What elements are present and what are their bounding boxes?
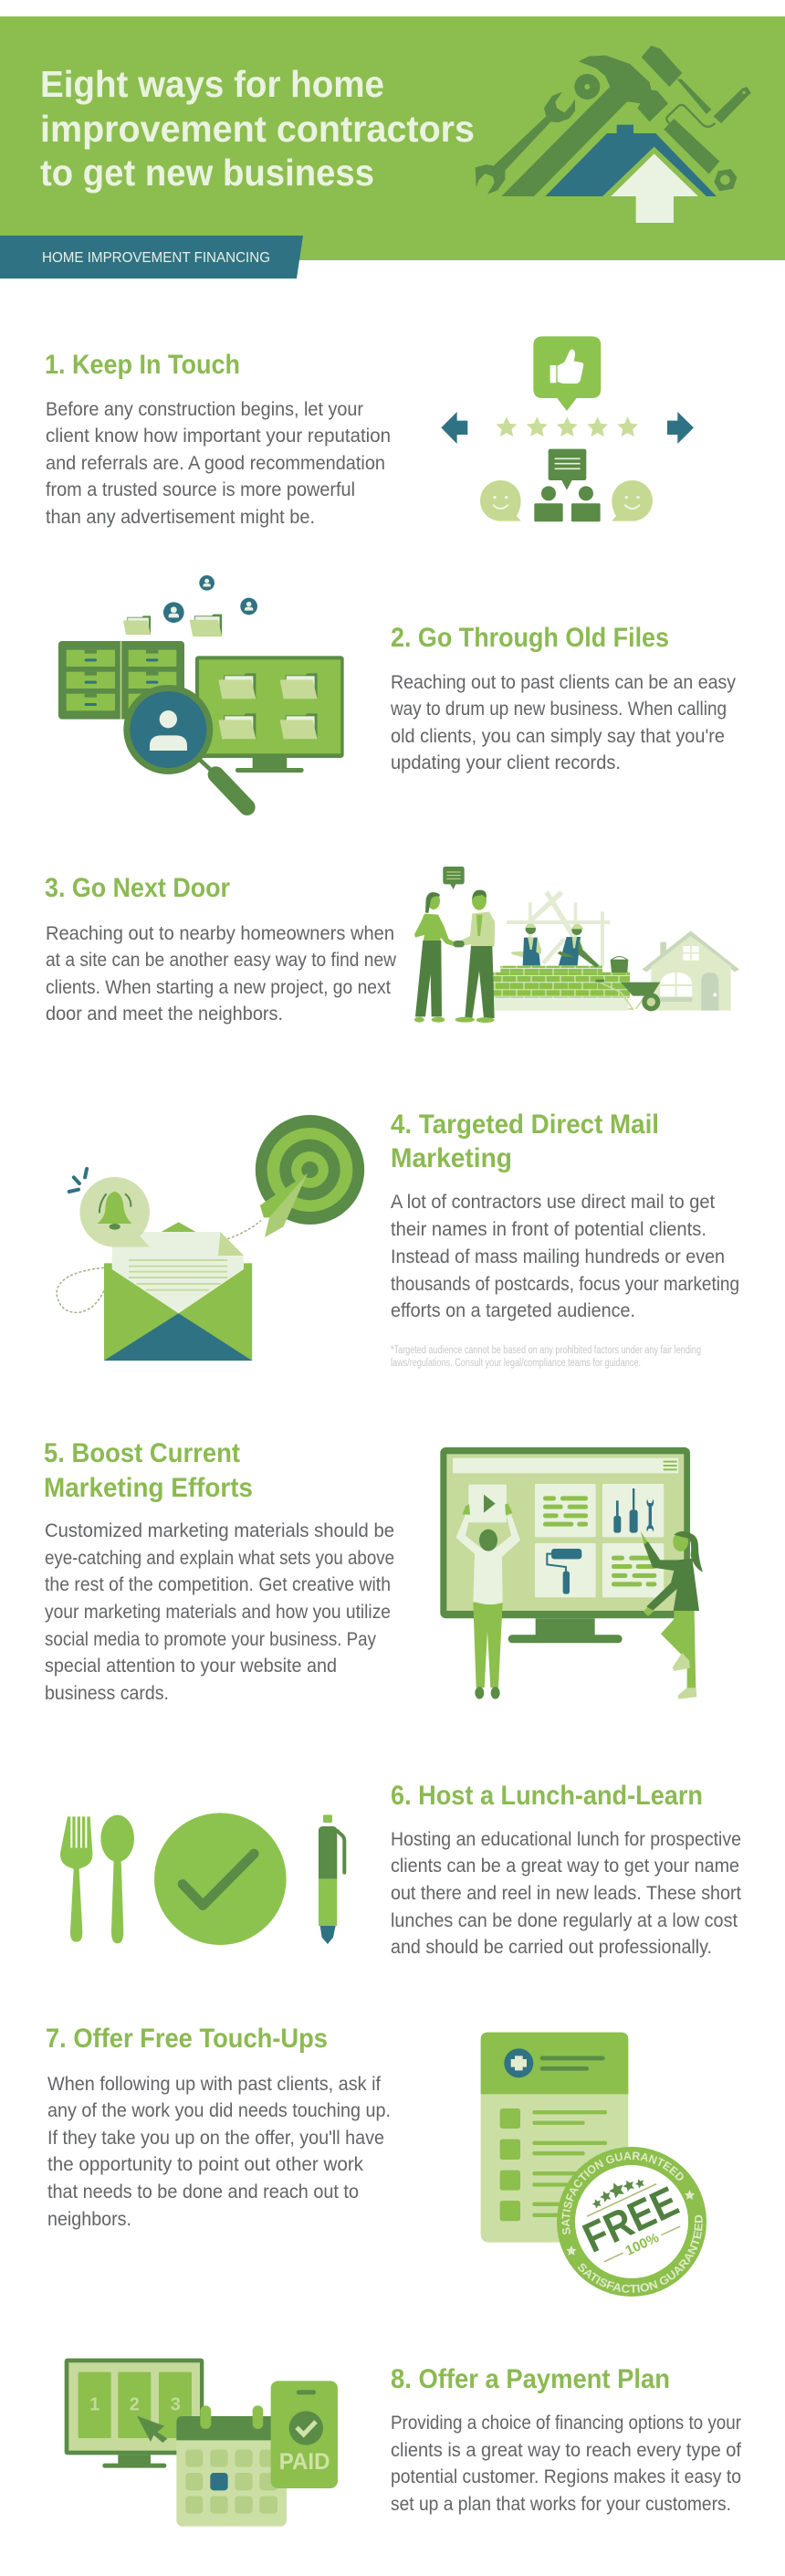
section 8 text: clients is a great way to reach every type of bbox=[391, 2440, 741, 2461]
section 1 text: than any advertisement might be. bbox=[46, 507, 315, 528]
title bbox=[40, 63, 475, 194]
section 4 heading bbox=[391, 1109, 659, 1173]
icon: reviews and referrals bbox=[441, 336, 694, 521]
section 4 text: A lot of contractors use direct mail to get bbox=[391, 1192, 715, 1213]
header banner bbox=[0, 16, 785, 260]
footnote: *Targeted audience cannot be based on any prohibited factors under any fair lending bbox=[391, 1345, 701, 1356]
footnote bbox=[391, 1345, 701, 1369]
section 3 heading: 3. Go Next Door bbox=[45, 873, 230, 903]
section 6 heading: 6. Host a Lunch-and-Learn bbox=[391, 1781, 703, 1811]
section 8 text bbox=[391, 2413, 741, 2515]
section 4 text: Instead of mass mailing hundreds or even bbox=[391, 1246, 725, 1267]
footnote: laws/regulations. Consult your legal/compliance teams for guidance. bbox=[391, 1358, 641, 1369]
section 5 heading bbox=[44, 1438, 253, 1503]
section 7 text: When following up with past clients, ask if bbox=[47, 2074, 381, 2095]
section 5 text: Customized marketing materials should be bbox=[45, 1520, 394, 1541]
section 5 text: the rest of the competition. Get creative with bbox=[45, 1574, 391, 1595]
section 2 text: Reaching out to past clients can be an easy bbox=[391, 672, 736, 693]
section 1 text: Before any construction begins, let your bbox=[46, 399, 363, 420]
section 8 text: set up a plan that works for your customers. bbox=[391, 2494, 731, 2515]
section 1 text: from a trusted source is more powerful bbox=[46, 479, 355, 500]
icon: house and tools bbox=[476, 46, 751, 223]
section 6 text: Hosting an educational lunch for prospective bbox=[391, 1829, 741, 1850]
icon: payment plan: 1 bbox=[89, 2394, 99, 2414]
section 5 text: business cards. bbox=[45, 1683, 169, 1704]
section 7 heading: 7. Offer Free Touch-Ups bbox=[46, 2024, 328, 2054]
section 4 text: thousands of postcards, focus your marketing bbox=[391, 1274, 739, 1295]
section 4 text: their names in front of potential clients. bbox=[391, 1219, 706, 1240]
section 3 text: at a site can be another easy way to find new bbox=[46, 950, 397, 971]
section 8 text: Providing a choice of financing options to your bbox=[391, 2413, 741, 2434]
section 5 text bbox=[45, 1520, 394, 1704]
badge: free 100% satisfaction guaranteed: FREE bbox=[576, 2177, 686, 2262]
section 2 text: way to drum up new business. When calling bbox=[390, 699, 727, 720]
badge: free 100% satisfaction guaranteed: SATISFACTION GUARANTEED bbox=[561, 2151, 684, 2234]
section 2 text bbox=[390, 672, 736, 773]
section 5 text: eye-catching and explain what sets you above bbox=[45, 1548, 394, 1569]
section 5 text: social media to promote your business. Pay bbox=[45, 1629, 376, 1650]
section 6 text: and should be carried out professionally. bbox=[391, 1937, 712, 1958]
section 7 text: neighbors. bbox=[47, 2209, 131, 2230]
badge: free 100% satisfaction guaranteed: SATISFACTION GUARANTEED bbox=[578, 2215, 703, 2293]
icon: checklist document bbox=[481, 2033, 628, 2243]
section 4 text bbox=[391, 1192, 739, 1321]
icon: payment plan: 2 bbox=[130, 2394, 140, 2414]
section 2 text: updating your client records. bbox=[391, 752, 621, 773]
icon: lunch setting bbox=[60, 1813, 344, 1945]
icon: old files bbox=[58, 575, 344, 807]
icon: meeting the neighbors bbox=[414, 867, 739, 1023]
section 7 text: If they take you up on the offer, you'll have bbox=[47, 2128, 384, 2149]
section 7 text: that needs to be done and reach out to bbox=[47, 2182, 359, 2203]
icon: payment plan bbox=[65, 2359, 338, 2527]
icon: payment plan: PAID bbox=[279, 2449, 330, 2475]
section 6 text: out there and reel in new leads. These short bbox=[391, 1883, 741, 1904]
section 4 heading: 4. Targeted Direct Mail bbox=[391, 1109, 659, 1140]
section 1 heading: 1. Keep In Touch bbox=[45, 350, 240, 380]
category tab: HOME IMPROVEMENT FINANCING bbox=[42, 250, 270, 266]
icon: payment plan: 3 bbox=[171, 2394, 181, 2414]
section 6 text: clients can be a great way to get your name bbox=[391, 1856, 739, 1877]
section 2 heading: 2. Go Through Old Files bbox=[391, 623, 669, 653]
badge: free 100% satisfaction guaranteed: 100% bbox=[623, 2230, 662, 2259]
section 4 heading: Marketing bbox=[391, 1143, 512, 1173]
section 3 text: Reaching out to nearby homeowners when bbox=[46, 923, 394, 944]
section 1 text: and referrals are. A good recommendation bbox=[46, 453, 385, 474]
category tab bbox=[0, 236, 303, 279]
section 7 text: any of the work you did needs touching up. bbox=[47, 2100, 391, 2121]
title: Eight ways for home bbox=[40, 63, 384, 105]
section 3 text: clients. When starting a new project, go next bbox=[46, 977, 391, 998]
icon: targeted mail bbox=[57, 1115, 364, 1361]
badge: free 100% satisfaction guaranteed bbox=[557, 2147, 706, 2297]
section 5 heading: Marketing Efforts bbox=[44, 1473, 253, 1503]
section 3 text: door and meet the neighbors. bbox=[46, 1004, 283, 1025]
section 5 heading: 5. Boost Current bbox=[44, 1438, 240, 1468]
title: to get new business bbox=[40, 152, 374, 194]
section 5 text: special attention to your website and bbox=[45, 1656, 337, 1677]
section 3 text bbox=[46, 923, 397, 1025]
title: improvement contractors bbox=[40, 108, 475, 150]
section 1 text bbox=[46, 399, 391, 528]
section 7 text: the opportunity to point out other work bbox=[47, 2154, 363, 2175]
section 6 text: lunches can be done regularly at a low cost bbox=[391, 1910, 738, 1931]
section 4 text: efforts on a targeted audience. bbox=[391, 1300, 635, 1321]
icon: marketing on a monitor bbox=[440, 1447, 703, 1699]
section 2 text: old clients, you can simply say that you're bbox=[391, 726, 725, 747]
section 8 heading: 8. Offer a Payment Plan bbox=[391, 2364, 670, 2394]
section 1 text: client know how important your reputation bbox=[46, 426, 391, 447]
section 7 text bbox=[47, 2074, 391, 2230]
section 6 text bbox=[391, 1829, 741, 1958]
section 8 text: potential customer. Regions makes it easy to bbox=[391, 2466, 741, 2487]
section 5 text: your marketing materials and how you utilize bbox=[45, 1602, 391, 1623]
